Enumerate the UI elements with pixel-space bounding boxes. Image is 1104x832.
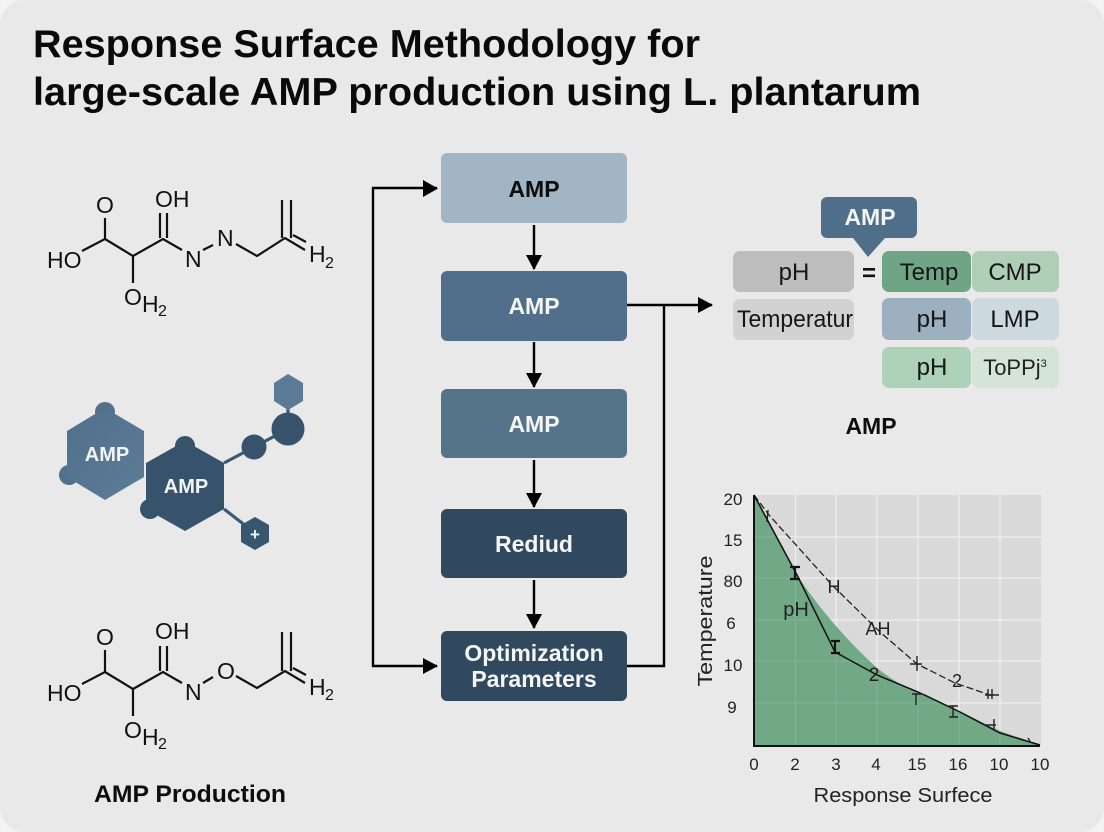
- node circles: [242, 434, 266, 460]
- cell: ToPPj: [972, 347, 1059, 388]
- y axis ticks: 80: [724, 572, 742, 591]
- x axis ticks: 4: [871, 755, 881, 774]
- arrow 2: [533, 342, 535, 387]
- box 2: [441, 271, 627, 341]
- cell: LMP: LMP: [990, 306, 1040, 333]
- equals sign: =: [862, 260, 876, 287]
- molecule: bottom structure: O: [217, 658, 235, 684]
- box 5: Parameters: [471, 666, 597, 692]
- arrow 4: [533, 580, 535, 628]
- molecule: top structure: [47, 186, 334, 320]
- x axis ticks: 10: [1031, 755, 1049, 774]
- molecule: top structure: 2: [158, 303, 167, 320]
- box 5: Optimization: [464, 640, 604, 666]
- dashed curve: 2: [952, 671, 962, 691]
- caption: AMP: AMP: [845, 413, 897, 439]
- molecule: bottom structure: HO: [47, 680, 82, 706]
- y axis ticks: 6: [726, 614, 736, 633]
- AMP callout: [821, 197, 917, 257]
- arrow 3: [533, 460, 535, 507]
- molecule: top structure: HO: [47, 247, 82, 273]
- y axis title: Temperature: [695, 556, 717, 686]
- cell: pH: [733, 251, 854, 292]
- x axis ticks: 2: [790, 755, 800, 774]
- dashed curve: H: [828, 577, 840, 597]
- box 3: [441, 389, 627, 458]
- cell: ToPPj: 3: [1041, 358, 1047, 370]
- molecule: top structure: O: [96, 192, 114, 218]
- x axis ticks: 3: [831, 755, 841, 774]
- x axis ticks: 10: [990, 755, 1008, 774]
- box 4: [441, 509, 627, 578]
- caption: AMP Production: AMP Production: [94, 781, 286, 808]
- cell: Temp: Temp: [900, 259, 958, 286]
- molecule: top structure: O: [124, 284, 142, 310]
- dashed curve: [754, 495, 999, 699]
- molecule: bottom structure: H: [309, 674, 326, 700]
- small hexagon top: [274, 374, 303, 410]
- arrow 1: [533, 225, 535, 269]
- cell: CMP: CMP: [988, 259, 1042, 286]
- AMP callout: AMP: [844, 204, 896, 230]
- y axis ticks: 10: [724, 656, 742, 675]
- solid curve: [754, 495, 1040, 745]
- molecule: top structure: H: [309, 241, 326, 267]
- x axis ticks: 15: [908, 755, 926, 774]
- title: [33, 23, 921, 114]
- cell: Temperatur: [733, 299, 854, 340]
- dashed curve: AH: [865, 619, 891, 639]
- y axis ticks: 15: [724, 531, 742, 550]
- x axis title: Response Surfece: [814, 785, 992, 807]
- small hexagon plus: +: [250, 525, 260, 544]
- connector bonds: [224, 392, 288, 533]
- parameter table: [733, 197, 1059, 388]
- x axis ticks: [749, 755, 1049, 774]
- molecule: top structure: 2: [325, 255, 334, 272]
- box 5: [441, 631, 627, 701]
- green surface: [754, 495, 1040, 745]
- cell: CMP: [972, 251, 1059, 292]
- right feedback line: [627, 305, 664, 666]
- molecule: bottom structure: 2: [158, 736, 167, 753]
- cell: Temp: [882, 251, 971, 292]
- y axis ticks: 9: [727, 698, 737, 717]
- plot background: [754, 495, 1041, 745]
- cell: pH: pH: [779, 259, 809, 286]
- hexagon: left AMP: AMP: [85, 444, 129, 466]
- x axis ticks: 16: [949, 755, 967, 774]
- molecule: bottom structure: OH: [155, 618, 190, 644]
- y axis ticks: [724, 490, 742, 717]
- solid curve: pH: [783, 599, 809, 621]
- x axis ticks: 0: [749, 755, 759, 774]
- molecule: bottom structure: O: [124, 717, 142, 743]
- box 4: Rediud: [495, 531, 573, 557]
- flowchart: [373, 153, 712, 701]
- box 2: AMP: [508, 293, 560, 319]
- molecule: top structure: N: [217, 225, 234, 251]
- hexagon: left AMP: [59, 402, 144, 500]
- molecule: AMP hexagon network: [59, 374, 304, 550]
- box 1: [441, 153, 627, 223]
- molecule: bottom structure: [47, 618, 334, 753]
- hexagon: right AMP: [140, 436, 224, 531]
- cell: pH blue: pH: [917, 306, 947, 333]
- title: large-scale AMP production using L. plantarum: [33, 71, 921, 114]
- cell: pH green: [882, 347, 971, 388]
- small hexagon plus: [241, 517, 269, 550]
- output arrow and right loop: [627, 304, 712, 306]
- arrowhead into first box: [423, 180, 438, 197]
- molecule: top structure: N: [185, 246, 202, 272]
- molecule: bottom structure: O: [96, 624, 114, 650]
- molecule: bottom structure: 2: [325, 687, 334, 704]
- title: Response Surface Methodology for: [33, 23, 700, 66]
- response surface chart: [695, 490, 1049, 807]
- cell: pH blue: [882, 298, 971, 340]
- molecule: top structure: OH: [155, 186, 190, 212]
- cell: Temperatur: Temperatur: [737, 306, 853, 333]
- molecule: bottom structure: H: [142, 724, 159, 750]
- hexagon: right AMP: AMP: [164, 476, 208, 498]
- feedback loop left: [373, 188, 437, 666]
- y axis ticks: 20: [724, 490, 742, 509]
- cell: ToPPj: ToPPj: [983, 355, 1041, 380]
- cell: pH green: pH: [917, 354, 947, 381]
- molecule: bottom structure: N: [185, 679, 202, 705]
- axes: [754, 495, 1040, 746]
- box 3: AMP: [508, 411, 560, 437]
- solid curve: 2: [869, 665, 879, 686]
- cell: LMP: [972, 298, 1059, 340]
- box 1: AMP: [508, 176, 560, 202]
- molecule: top structure: H: [142, 291, 159, 317]
